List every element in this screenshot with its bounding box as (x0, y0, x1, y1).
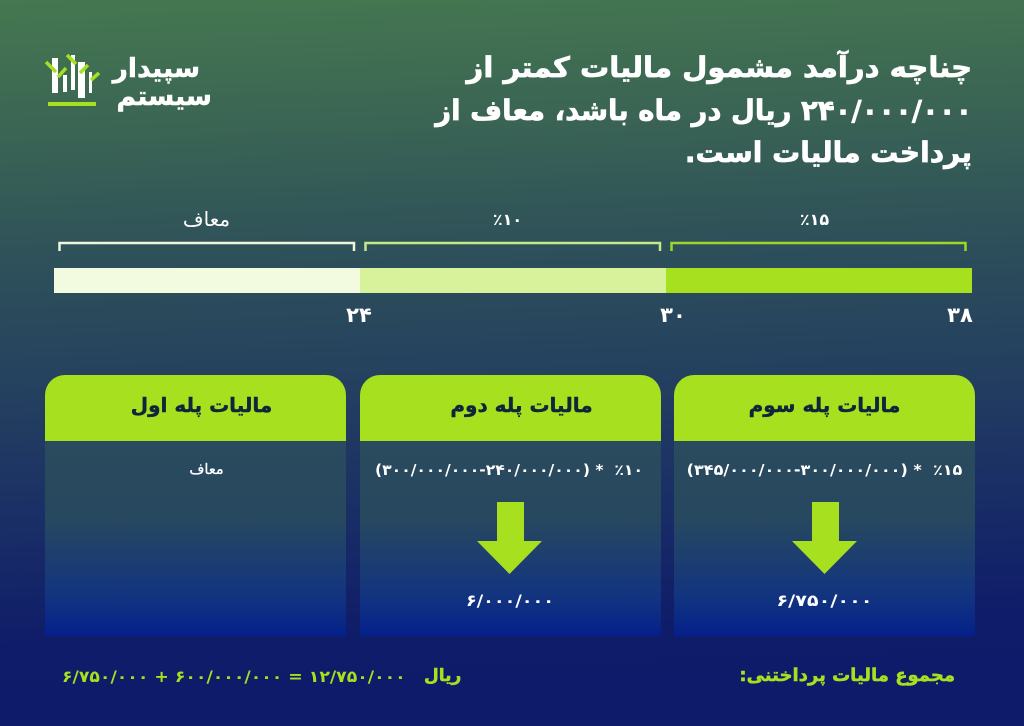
brackets (58, 242, 967, 251)
title: چناچه درآمد مشمول مالیات کمتر از (466, 51, 972, 84)
bracket label: 15 percent: ٪۱۵ (800, 210, 829, 229)
panel: second bracket: مالیات پله دوم (450, 393, 593, 417)
panel: second bracket (360, 375, 661, 636)
axis label 24: ۲۴ (346, 303, 372, 327)
logo: سیستم (117, 81, 212, 112)
total sum: ۶/۷۵۰/۰۰۰ + ۶۰۰/۰۰۰/۰۰۰ = ۱۲/۷۵۰/۰۰۰ (62, 667, 406, 686)
panel: third bracket: ۶/۷۵۰/۰۰۰ (776, 591, 873, 610)
axis label 30: ۳۰ (660, 303, 686, 327)
panel: first bracket: مالیات پله اول (131, 393, 272, 417)
bracket label: exempt: معاف (183, 207, 230, 231)
title: پرداخت مالیات است. (685, 136, 972, 169)
title (434, 49, 972, 170)
panel: second bracket: (۳۰۰/۰۰۰/۰۰۰-۲۴۰/۰۰۰/۰۰۰) * ٪۱۰ (375, 461, 643, 479)
panel: third bracket: (۳۴۵/۰۰۰/۰۰۰-۳۰۰/۰۰۰/۰۰۰) * ٪۱۵ (687, 461, 962, 479)
axis label 38: ۳۸ (947, 303, 973, 327)
panel: first bracket (45, 375, 346, 636)
title: ۲۴۰/۰۰۰/۰۰۰ ریال در ماه باشد، معاف از (435, 94, 972, 127)
progress bar (54, 268, 972, 293)
panel: second bracket: ۶/۰۰۰/۰۰۰ (466, 591, 554, 610)
logo (44, 53, 212, 112)
total label: مجموع مالیات پرداختنی: (739, 665, 955, 686)
panel: third bracket: مالیات پله سوم (749, 393, 900, 417)
bracket label: 10 percent: ٪۱۰ (493, 210, 522, 229)
total unit: ریال (424, 666, 461, 686)
panel: third bracket (674, 375, 975, 636)
logo: سپیدار (113, 53, 200, 84)
panel: first bracket: معاف (189, 462, 224, 478)
